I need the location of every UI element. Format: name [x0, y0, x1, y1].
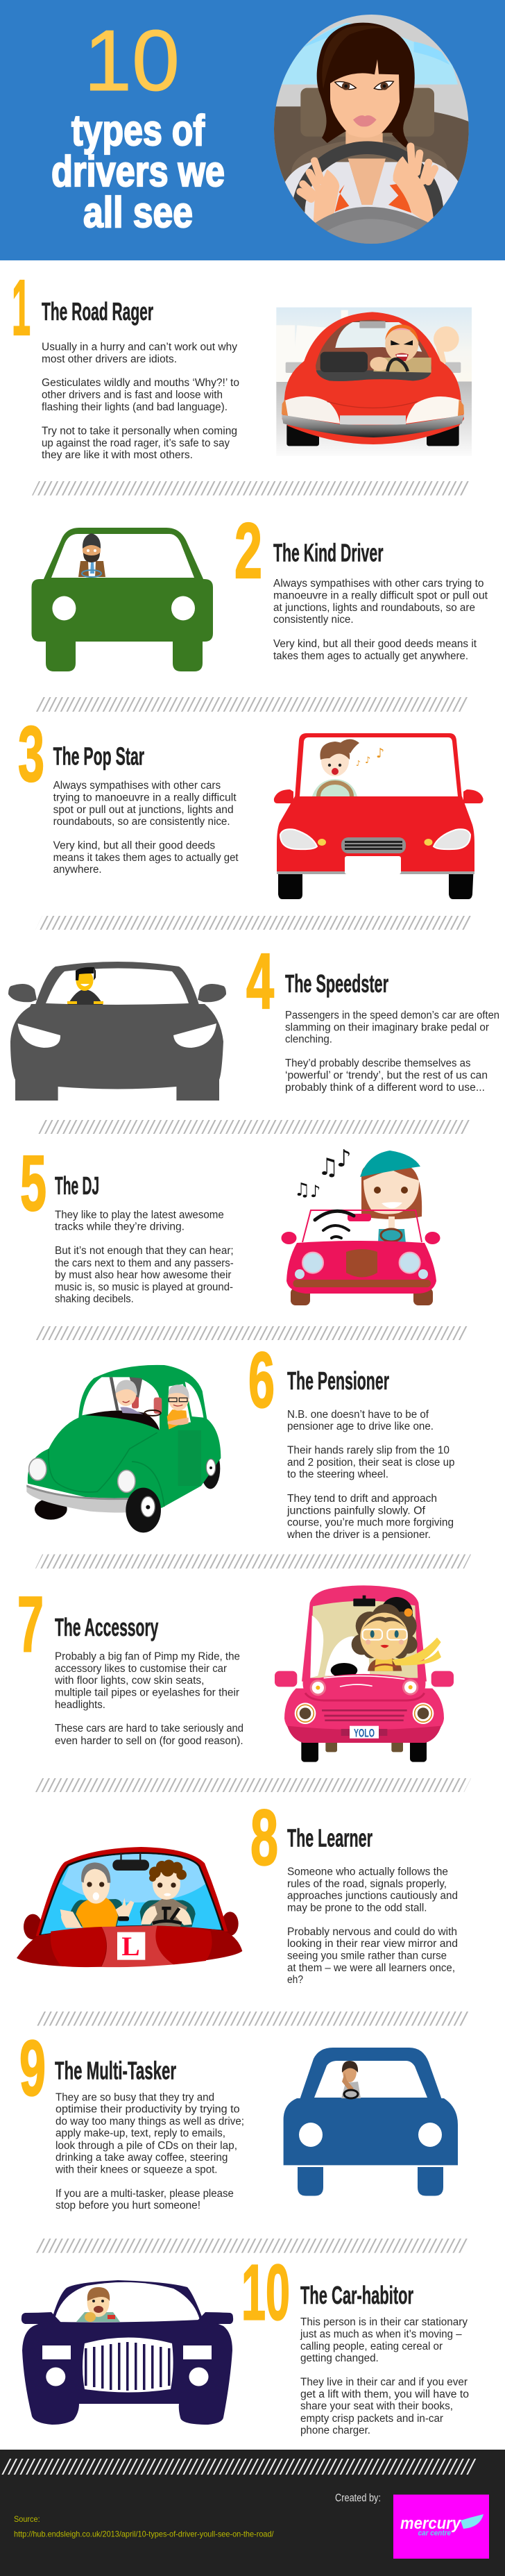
- number 8: 8: [250, 1793, 278, 1881]
- body text: approaches junctions cautiously and: [287, 1890, 458, 1902]
- body text: with their knees or squeeze a spot.: [55, 2164, 218, 2175]
- body text: calling people, eating cereal or: [300, 2341, 443, 2352]
- title text: types of: [71, 107, 205, 155]
- panel: The Accessory: [17, 1580, 454, 1762]
- scarf: [392, 1637, 441, 1666]
- number 2: 2: [234, 507, 262, 594]
- body text: Always sympathises with other cars: [53, 780, 221, 792]
- source credit: [14, 2514, 274, 2539]
- body text: and 2 position, their seat is close up: [287, 1457, 455, 1469]
- body text: tracks while they’re driving.: [55, 1221, 185, 1233]
- body text: manoeuvre in a really difficult spot or pull out: [273, 590, 488, 601]
- body text: seeing you smile rather than curse: [287, 1950, 447, 1962]
- body text: Very kind, but all their good deeds means it: [273, 638, 477, 650]
- body text: [300, 2316, 469, 2436]
- body text: up against the road rager, it’s safe to say: [42, 437, 230, 449]
- body text: apply make-up, text, reply to emails,: [55, 2127, 225, 2139]
- body text: They live in their car and if you ever: [300, 2377, 468, 2389]
- body text: [287, 1866, 458, 1986]
- body text: headlights.: [55, 1699, 105, 1711]
- panel: The Road Rager: [12, 264, 472, 461]
- body text: N.B. one doesn’t have to be of: [287, 1409, 429, 1421]
- L plate letter: L: [121, 1931, 140, 1962]
- body text: music is, so music is played at ground-: [55, 1282, 233, 1294]
- illustration: red car with learner and instructor: [17, 1847, 242, 1967]
- heading: The Accessory: [55, 1613, 158, 1641]
- heading: The Speedster: [285, 969, 388, 998]
- body text: [53, 780, 239, 876]
- body text: [273, 578, 488, 662]
- illustration: green beetle with pensioners: [26, 1365, 221, 1532]
- title text: all see: [83, 189, 193, 237]
- instructor: [60, 1862, 134, 1928]
- body text: course, you’re much more forgiving: [287, 1517, 454, 1529]
- heading: The Pop Star: [53, 742, 144, 771]
- panel: The Learner: [17, 1793, 458, 1986]
- body text: Usually in a hurry and can’t work out why: [42, 342, 237, 353]
- illustration: green car: [32, 528, 213, 671]
- body text: pensioner age to drive like one.: [287, 1421, 434, 1432]
- body text: with floor lights, cow skin seats,: [54, 1675, 204, 1687]
- body text: Very kind, but all their good deeds: [53, 840, 215, 852]
- body text: slamming on their imaginary brake pedal or: [285, 1021, 489, 1033]
- illustration: dark grey sports car: [8, 962, 226, 1101]
- body text: Passengers in the speed demon’s car are often: [285, 1010, 499, 1021]
- footer panel: [0, 2450, 505, 2576]
- body text: Someone who actually follows the: [287, 1866, 448, 1878]
- body text: eh?: [287, 1974, 303, 1986]
- music notes: [294, 1145, 352, 1201]
- body text: rules of the road, signals properly,: [287, 1878, 447, 1890]
- music notes: [356, 746, 384, 768]
- panel: The Car-habitor: [22, 2249, 469, 2436]
- heading: The Kind Driver: [273, 539, 383, 567]
- heading: The Road Rager: [42, 297, 153, 326]
- illustration: pink car with YOLO plate: [275, 1585, 454, 1762]
- body text: Probably a big fan of Pimp my Ride, the: [55, 1651, 240, 1663]
- driver with glasses: [352, 1597, 418, 1671]
- heading: The Car-habitor: [300, 2281, 413, 2309]
- wifi symbol: [315, 1211, 354, 1238]
- panel: The Multi-Tasker: [19, 2024, 458, 2211]
- panel: The Road Rager: 1: [12, 264, 31, 351]
- radiator grille: [83, 2337, 173, 2393]
- header panel: [0, 0, 505, 278]
- music notes: ♫: [294, 1180, 310, 1201]
- driver with beard: [78, 533, 105, 577]
- body text: just as much as when it’s moving –: [300, 2328, 462, 2340]
- created by label: Created by:: [335, 2493, 381, 2504]
- body text: even harder to sell on (for good reason).: [55, 1735, 243, 1747]
- singing driver: [312, 739, 359, 810]
- music notes: ♪: [365, 755, 370, 766]
- heading: The DJ: [55, 1171, 99, 1200]
- body text: [55, 2091, 244, 2211]
- illustration: pink car with DJ: [282, 1145, 440, 1305]
- body text: optimise their productivity by trying to: [55, 2104, 240, 2116]
- logo: mercury car centre: car centre: [418, 2529, 451, 2538]
- panel: The Pensioner: [26, 1336, 455, 1541]
- flower decals: [310, 1679, 418, 1696]
- body text: the cars next to them and any passers-: [55, 1257, 234, 1269]
- body text: may be prone to the odd stall.: [287, 1902, 427, 1914]
- body text: flashing their lights (and bad language).: [42, 401, 228, 413]
- body text: get a lift with them, you will have to: [300, 2389, 469, 2400]
- illustration: red car with angry driver: [276, 308, 472, 456]
- body text: means it takes them ages to actually get: [53, 852, 239, 864]
- driver eating: [76, 2287, 120, 2322]
- music notes: ♪: [310, 1182, 320, 1201]
- body text: multiple tail pipes or eyelashes for their: [55, 1687, 239, 1698]
- heading: The Multi-Tasker: [55, 2057, 176, 2084]
- body text: They’d probably describe themselves as: [285, 1057, 471, 1069]
- number 9: 9: [19, 2024, 46, 2111]
- body text: drinking a take away coffee, steering: [55, 2152, 228, 2164]
- body text: roundabouts, so are consistently nice.: [53, 816, 230, 828]
- music notes: ♪: [336, 1145, 352, 1173]
- multi-tasking driver: [341, 2061, 361, 2098]
- body text: spot or pull out at junctions, lights and: [53, 804, 234, 816]
- body text: do way too many things as well as drive;: [55, 2116, 244, 2127]
- body text: by must also hear how awesome their: [55, 1269, 231, 1281]
- illustration: red car with singing driver: [274, 733, 483, 899]
- driver with teal hat: [360, 1151, 422, 1243]
- body text: at them – we were all learners once,: [287, 1962, 455, 1974]
- number 4: 4: [246, 937, 274, 1025]
- body text: probably think of a different word to use...: [285, 1082, 485, 1094]
- pensioner woman: [116, 1380, 144, 1414]
- number 7: 7: [17, 1580, 44, 1668]
- body text: If you are a multi-tasker, please please: [55, 2188, 234, 2200]
- title number 10: 10: [84, 13, 180, 109]
- body text: Their hands rarely slip from the 10: [287, 1445, 450, 1457]
- body text: They like to play the latest awesome: [55, 1210, 224, 1221]
- body text: when the driver is a pensioner.: [286, 1529, 431, 1541]
- body text: shaking decibels.: [55, 1294, 134, 1305]
- illustration: woman driver in oval: [274, 15, 469, 244]
- body text: Gesticulates wildly and mouths ‘Why?!’ to: [42, 377, 239, 389]
- body text: look through a pile of CDs on their lap,: [55, 2140, 237, 2152]
- heading: The Pensioner: [287, 1366, 389, 1395]
- music notes: ♪: [356, 759, 361, 768]
- number 5: 5: [20, 1139, 46, 1227]
- body text: phone charger.: [300, 2425, 370, 2436]
- body text: [42, 342, 239, 461]
- number 10: 10: [241, 2249, 290, 2336]
- body text: junctions painfully slowly. Of: [286, 1505, 426, 1516]
- body text: Probably nervous and could do with: [287, 1926, 457, 1938]
- body text: at junctions, lights and roundabouts, so are: [273, 602, 475, 614]
- music notes: ♫: [318, 1153, 339, 1181]
- body text: ‘powerful’ or ‘trendy’, but the rest of us can: [285, 1069, 488, 1081]
- illustration: blue car: [284, 2048, 458, 2196]
- body text: trying to manoeuvre in a really difficult: [53, 792, 237, 804]
- plate text: YOLO: [354, 1727, 375, 1740]
- body text: other drivers and is fast and loose with: [42, 389, 223, 401]
- source credit: Source:: [14, 2514, 40, 2524]
- illustration: dark purple luxury car: [22, 2280, 233, 2425]
- body text: Always sympathises with other cars trying to: [273, 578, 484, 589]
- panel: The Speedster: [8, 937, 499, 1101]
- body text: [286, 1409, 455, 1541]
- body text: getting changed.: [300, 2352, 379, 2364]
- body text: These cars are hard to take seriously and: [55, 1723, 243, 1734]
- logo: mercury car centre: mercury: [400, 2514, 462, 2533]
- music notes: ♪: [376, 746, 384, 761]
- body text: They are so busy that they try and: [55, 2091, 214, 2104]
- panel: The Pop Star: [18, 710, 483, 899]
- body text: share your seat with their books,: [300, 2400, 453, 2412]
- body text: [285, 1010, 499, 1094]
- body text: This person is in their car stationary: [300, 2316, 468, 2328]
- source credit: http://hub.endsleigh.co.uk/2013/april/10-types-of-driver-youll-see-on-the-road/: [14, 2529, 274, 2539]
- body text: [54, 1651, 243, 1747]
- number 6: 6: [248, 1336, 275, 1423]
- body text: accessory likes to customise their car: [55, 1663, 227, 1675]
- body text: anywhere.: [53, 864, 102, 876]
- body text: to the steering wheel.: [287, 1469, 388, 1480]
- body text: looking in their rear view mirror and: [287, 1938, 458, 1950]
- body text: Try not to take it personally when coming: [42, 425, 237, 437]
- body text: consistently nice.: [273, 614, 354, 626]
- body text: But it’s not enough that they can hear;: [55, 1245, 234, 1257]
- body text: they are like it with most others.: [42, 449, 193, 461]
- driver: [67, 967, 103, 1005]
- body text: clenching.: [285, 1034, 332, 1046]
- body text: [55, 1210, 234, 1305]
- heading: The Learner: [287, 1824, 373, 1852]
- body text: takes them ages to actually get anywhere.: [273, 650, 468, 662]
- number 3: 3: [18, 710, 44, 797]
- title text: drivers we: [51, 148, 225, 196]
- body text: most other drivers are idiots.: [42, 353, 177, 365]
- body text: empty crisp packets and in-car: [300, 2413, 443, 2425]
- pensioner man: [167, 1385, 189, 1430]
- panel: The DJ: [20, 1139, 440, 1305]
- learner driver: [140, 1859, 196, 1927]
- body text: They tend to drift and approach: [287, 1493, 437, 1505]
- body text: stop before you hurt someone!: [55, 2200, 200, 2211]
- logo: mercury car centre: [393, 2495, 489, 2559]
- panel: The Kind Driver: [32, 507, 488, 671]
- title text: [51, 107, 225, 237]
